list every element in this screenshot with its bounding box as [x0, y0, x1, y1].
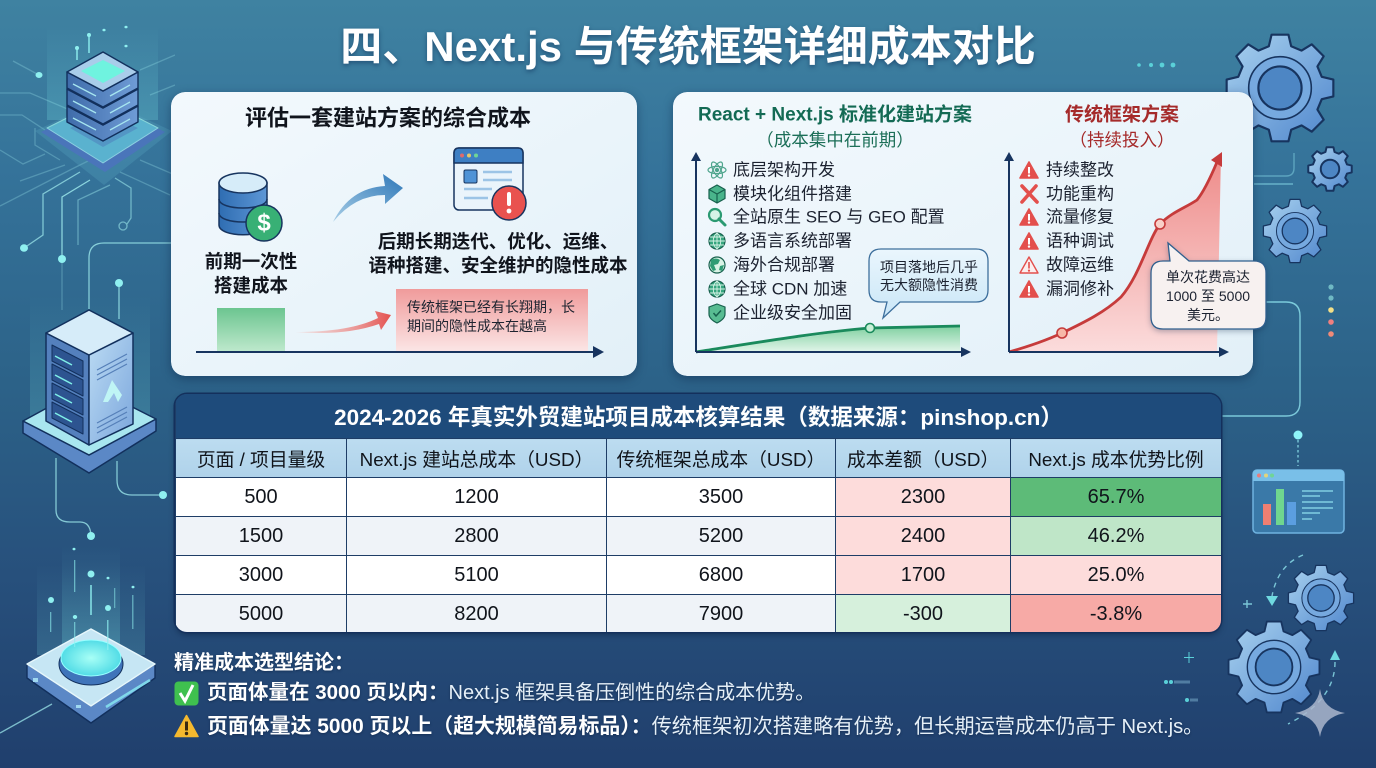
- list: traditional items: [1046, 160, 1114, 298]
- icon: glowing base platform: [27, 545, 155, 723]
- table: real project cost accounting: 6800: [699, 564, 743, 586]
- heading: Next.js plan: [698, 102, 972, 150]
- table: real project cost accounting: -300: [903, 602, 943, 624]
- icon: gear medium bottom: [1288, 565, 1354, 631]
- icon: gear medium top: [1263, 199, 1327, 263]
- table: real project cost accounting: 5200: [699, 524, 743, 546]
- table: real project cost accounting: 2024-2026 年真实外贸建站项目成本核算结果（数据来源：pinshop.cn）: [334, 405, 1063, 430]
- table: real project cost accounting: 5100: [454, 564, 499, 586]
- list: traditional items: 故障运维: [1046, 256, 1114, 274]
- icon: gear small top: [1308, 147, 1352, 191]
- callout: single cost up to 5000 USD: 单次花费高达: [1166, 269, 1250, 285]
- icon: database with dollar: $: [257, 210, 271, 236]
- icons: traditional list: [1020, 162, 1038, 297]
- list: Next.js items: 企业级安全加固: [733, 304, 852, 322]
- callout: no hidden cost: 无大额隐性消费: [880, 277, 978, 293]
- icon: stacked server on platform: [35, 25, 172, 185]
- table: real project cost accounting: 2400: [901, 524, 945, 546]
- label: upfront cost: 前期一次性: [205, 250, 297, 272]
- icon: warning triangle: [174, 714, 199, 738]
- label: long-term hidden cost: 语种搭建、安全维护的隐性成本: [368, 254, 628, 276]
- bar: green upfront cost: [217, 308, 285, 352]
- table: real project cost accounting: 500: [244, 486, 278, 508]
- table: real project cost accounting: 3000: [239, 564, 283, 586]
- panel: overall cost evaluation: [165, 91, 641, 382]
- list: Next.js items: [733, 160, 945, 322]
- table: real project cost accounting: 2300: [901, 486, 945, 508]
- heading: Next.js plan: React + Next.js 标准化建站方案: [698, 102, 972, 126]
- table: real project cost accounting: 25.0%: [1088, 564, 1144, 586]
- callout: red hidden cost box: 传统框架已经有长翔期，长: [407, 299, 575, 315]
- table: real project cost accounting: 8200: [454, 602, 499, 624]
- conclusions heading: 精准成本选型结论：: [174, 652, 354, 674]
- circuit lines: [0, 55, 175, 733]
- list: Next.js items: 底层架构开发: [733, 160, 835, 180]
- heading: Next.js plan: （成本集中在前期）: [756, 130, 914, 150]
- icon: gear large top: [1227, 35, 1333, 141]
- heading: traditional plan: [1065, 102, 1179, 150]
- heading: traditional plan: 传统框架方案: [1065, 102, 1179, 126]
- arrow: blue curved: [333, 174, 403, 222]
- table: real project cost accounting: Next.js 建站总成本（USD）: [360, 448, 593, 470]
- table: real project cost accounting: 5000: [239, 602, 283, 624]
- table: real project cost accounting: 页面 / 项目量级: [197, 448, 325, 470]
- icon: green check: [174, 682, 198, 706]
- table: real project cost accounting: 65.7%: [1088, 486, 1144, 508]
- arrow: red rising: [295, 311, 391, 333]
- callout: single cost up to 5000 USD: 1000 至 5000: [1166, 288, 1250, 304]
- conclusion: under 3000 pages: 页面体量在 3000 页以内：Next.js 框架具备压倒性的综合成本优势。: [207, 681, 815, 704]
- callout: single cost up to 5000 USD: [1147, 241, 1270, 335]
- table: real project cost accounting: 46.2%: [1088, 524, 1144, 546]
- label: long-term hidden cost: 后期长期迭代、优化、运维、: [378, 230, 618, 252]
- arrow: time axis: [196, 346, 604, 358]
- chart: Next.js cost curve: [691, 152, 971, 357]
- callout: single cost up to 5000 USD: 美元。: [1187, 307, 1229, 323]
- icon: database with dollar: [219, 173, 282, 241]
- table: real project cost accounting: Next.js 成本优势比例: [1028, 448, 1204, 470]
- list: Next.js items: 全球 CDN 加速: [733, 280, 847, 298]
- chart: traditional cost curve: [1004, 152, 1229, 357]
- table: real project cost accounting: 成本差额（USD）: [847, 448, 999, 470]
- title: 四、Next.js 与传统框架详细成本对比: [340, 23, 1036, 70]
- table: real project cost accounting: 1500: [239, 524, 283, 546]
- callout: no hidden cost: 项目落地后几乎: [880, 259, 978, 275]
- list: Next.js items: 多语言系统部署: [733, 232, 852, 250]
- conclusion: over 5000 pages: 页面体量达 5000 页以上（超大规模简易标品）：传统框架初次搭建略有优势，但长期运营成本仍高于 Next.js。: [207, 715, 1203, 738]
- list: traditional items: 功能重构: [1046, 184, 1114, 204]
- icon: gear large bottom: [1229, 622, 1319, 712]
- icon: browser warning: [454, 148, 526, 220]
- left illustration: servers and circuit lines: [0, 26, 175, 734]
- table: real project cost accounting: 1200: [454, 486, 499, 508]
- list: Next.js items: 模块化组件搭建: [733, 184, 852, 204]
- circuit nodes: [20, 72, 167, 540]
- list: traditional items: 流量修复: [1046, 208, 1114, 226]
- callout: red hidden cost box: 期间的隐性成本在越高: [407, 318, 547, 334]
- panel: Next.js vs traditional cost curves: [669, 89, 1259, 382]
- heading: traditional plan: （持续投入）: [1070, 130, 1174, 150]
- heading: 评估一套建站方案的综合成本: [245, 106, 531, 130]
- table: real project cost accounting: 7900: [699, 602, 743, 624]
- decorative sparkles near conclusions: [1164, 652, 1198, 702]
- table: real project cost accounting: 3500: [699, 486, 743, 508]
- table: real project cost accounting: 传统框架总成本（USD）: [617, 448, 825, 470]
- list: Next.js items: 全站原生 SEO 与 GEO 配置: [733, 208, 945, 226]
- table: real project cost accounting: 2800: [454, 524, 499, 546]
- list: Next.js items: 海外合规部署: [733, 256, 835, 274]
- icon: dashboard node: [1294, 430, 1302, 440]
- icon: sparkle star: [1295, 689, 1345, 737]
- icons: Next.js list: [708, 160, 726, 323]
- connector lines: [1222, 153, 1335, 724]
- table: real project cost accounting: 1700: [901, 564, 945, 586]
- label: upfront cost: 搭建成本: [214, 274, 288, 296]
- list: traditional items: 持续整改: [1046, 160, 1114, 180]
- decorative header dots: [1137, 62, 1176, 68]
- icon: status dots: [1328, 284, 1334, 337]
- callout: red hidden cost box: [396, 289, 588, 352]
- icon: server cube on platform: [23, 295, 156, 473]
- list: traditional items: 漏洞修补: [1046, 280, 1114, 298]
- table: real project cost accounting: [175, 394, 1221, 632]
- icon: small arrows: [1266, 596, 1340, 660]
- list: traditional items: 语种调试: [1046, 232, 1114, 250]
- right illustration: gears, connectors and dashboard: [1222, 34, 1354, 737]
- table: real project cost accounting: -3.8%: [1090, 602, 1142, 624]
- icon: dashboard window: [1253, 470, 1344, 533]
- callout: no hidden cost: [869, 249, 988, 318]
- conclusions block: [174, 652, 1203, 738]
